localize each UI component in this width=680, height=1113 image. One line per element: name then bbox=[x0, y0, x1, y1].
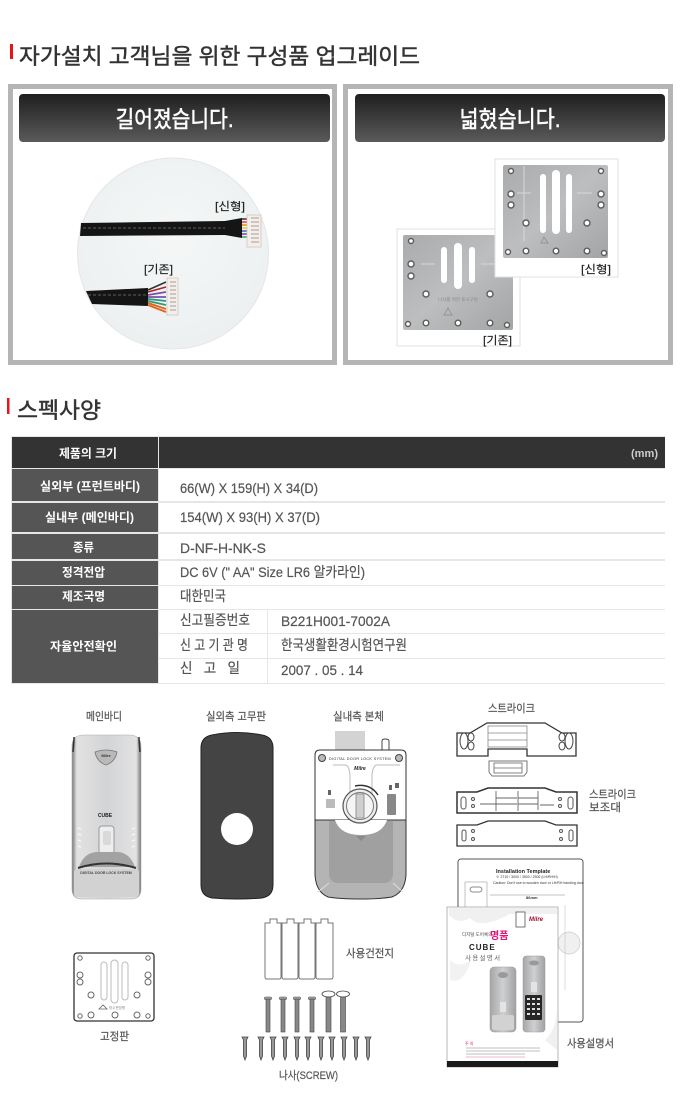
component: strike support: 스트라이크 bbox=[589, 788, 636, 801]
row: safety confirmation: 한국생활환경시험연구원 bbox=[281, 637, 407, 653]
label: screws: 나사(SCREW) bbox=[279, 1069, 338, 1082]
spec table bbox=[11, 436, 665, 684]
component: short screws bbox=[242, 1037, 371, 1060]
label: manual: 사용설명서 bbox=[567, 1037, 614, 1050]
label: old: [기존] bbox=[144, 263, 173, 276]
component: installation template sheet: Installation Template bbox=[496, 869, 550, 875]
row: size header: 제품의 크기 bbox=[59, 446, 117, 460]
component: user manual bbox=[447, 907, 558, 1067]
photo: cables in a circle bbox=[78, 158, 268, 349]
component: indoor body: Milre bbox=[354, 766, 366, 772]
component: user manual: 디지털 도어록의 bbox=[462, 931, 492, 938]
component: installation template sheet: ※ 2710 / 3000 / 3500 / 2300 (LH/RH/H) bbox=[496, 875, 558, 879]
label: batteries: 사용건전지 bbox=[346, 947, 394, 960]
row: safety confirmation: B221H001-7002A bbox=[281, 613, 391, 629]
component: installation template sheet: 86mm bbox=[526, 895, 538, 900]
label: new: [신형] bbox=[581, 263, 611, 276]
component: fixing plate bbox=[74, 953, 154, 1021]
row: safety confirmation: 신고필증번호 bbox=[180, 612, 250, 628]
component: installation template sheet: Caution: Don't use to wooden door or LH/RH handing door bbox=[493, 881, 585, 885]
component: main body bbox=[72, 710, 141, 899]
component: main body: DIGITAL DOOR LOCK SYSTEM bbox=[80, 871, 132, 875]
component: strike: 스트라이크 bbox=[488, 702, 535, 715]
component: installation template sheet bbox=[458, 859, 585, 1022]
panel header: wider bbox=[355, 94, 665, 142]
row: country of manufacture bbox=[12, 586, 665, 609]
component: user manual: CUBE bbox=[469, 943, 496, 952]
component: main body: Milre bbox=[101, 753, 111, 758]
label: new: [신형] bbox=[215, 200, 245, 213]
heading: specifications: 스펙사양 bbox=[17, 398, 101, 423]
new cable bbox=[80, 215, 261, 247]
row: type bbox=[12, 534, 665, 559]
component: main body: CUBE bbox=[98, 813, 113, 819]
photo: old plate: 나사를 위한 표시구멍 bbox=[438, 296, 478, 303]
component: user manual: 주 의 bbox=[465, 1040, 474, 1046]
component: outdoor rubber pad bbox=[201, 710, 273, 899]
row: rated voltage: DC 6V (" AA" Size LR6 알카라인) bbox=[180, 564, 365, 580]
row: indoor body bbox=[12, 503, 665, 532]
heading: upgrade: 자가설치 고객님을 위한 구성품 업그레이드 bbox=[19, 44, 420, 69]
component: user manual: 명품 bbox=[490, 930, 508, 942]
row: type: 종류 bbox=[73, 540, 94, 554]
row: country of manufacture: 제조국명 bbox=[62, 588, 105, 604]
panel header: wider: 넓혔습니다. bbox=[460, 106, 560, 132]
row: indoor body: 154(W) X 93(H) X 37(D) bbox=[180, 509, 320, 525]
row: outdoor body bbox=[12, 469, 665, 501]
label: old: [기존] bbox=[483, 334, 512, 347]
row: size header bbox=[12, 437, 665, 468]
photo: new plate bbox=[495, 159, 618, 277]
row: size header: (mm) bbox=[631, 448, 658, 460]
component: strike flat plate bbox=[457, 821, 577, 846]
row: safety confirmation: 2007 . 05 . 14 bbox=[281, 662, 363, 678]
component: main body: 메인바디 bbox=[86, 710, 122, 723]
component: strike bbox=[457, 702, 576, 776]
row: safety confirmation: 신 고 기 관 명 bbox=[180, 637, 248, 653]
row: outdoor body: 66(W) X 159(H) X 34(D) bbox=[180, 480, 318, 496]
row: country of manufacture: 대한민국 bbox=[180, 588, 226, 604]
component: strike support: 보조대 bbox=[589, 801, 621, 814]
component: indoor body: DIGITAL DOOR LOCK SYSTEM bbox=[329, 757, 391, 761]
panel header: longer: 길어졌습니다. bbox=[116, 106, 234, 132]
photo: old plate bbox=[397, 229, 520, 347]
row: rated voltage: 정격전압 bbox=[62, 566, 105, 580]
panel: wider plate bbox=[346, 86, 670, 362]
component: user manual: 사용설명서 bbox=[465, 953, 501, 962]
component: long screws bbox=[264, 991, 350, 1032]
component: strike support bbox=[457, 788, 636, 814]
old cable bbox=[86, 278, 178, 315]
row: safety confirmation bbox=[12, 610, 665, 683]
component: outdoor rubber pad: 실외측 고무판 bbox=[206, 710, 266, 723]
row: safety confirmation: 신 고 일 bbox=[180, 660, 240, 676]
row: safety confirmation: 자율안전확인 bbox=[50, 638, 117, 654]
row: rated voltage bbox=[12, 561, 665, 585]
component: fixing plate: 방수판방향 bbox=[109, 1005, 126, 1010]
row: indoor body: 실내부 (메인바디) bbox=[45, 510, 134, 524]
panel: longer cable bbox=[10, 86, 334, 362]
component: user manual: Milre bbox=[529, 917, 544, 923]
row: outdoor body: 실외부 (프런트바디) bbox=[40, 478, 140, 494]
label: fixing plate: 고정판 bbox=[100, 1030, 129, 1043]
panel header: longer bbox=[19, 94, 330, 142]
component: indoor body: 실내측 본체 bbox=[333, 710, 384, 723]
component: batteries bbox=[265, 919, 333, 979]
component: indoor body bbox=[315, 710, 406, 899]
row: type: D-NF-H-NK-S bbox=[180, 540, 266, 556]
